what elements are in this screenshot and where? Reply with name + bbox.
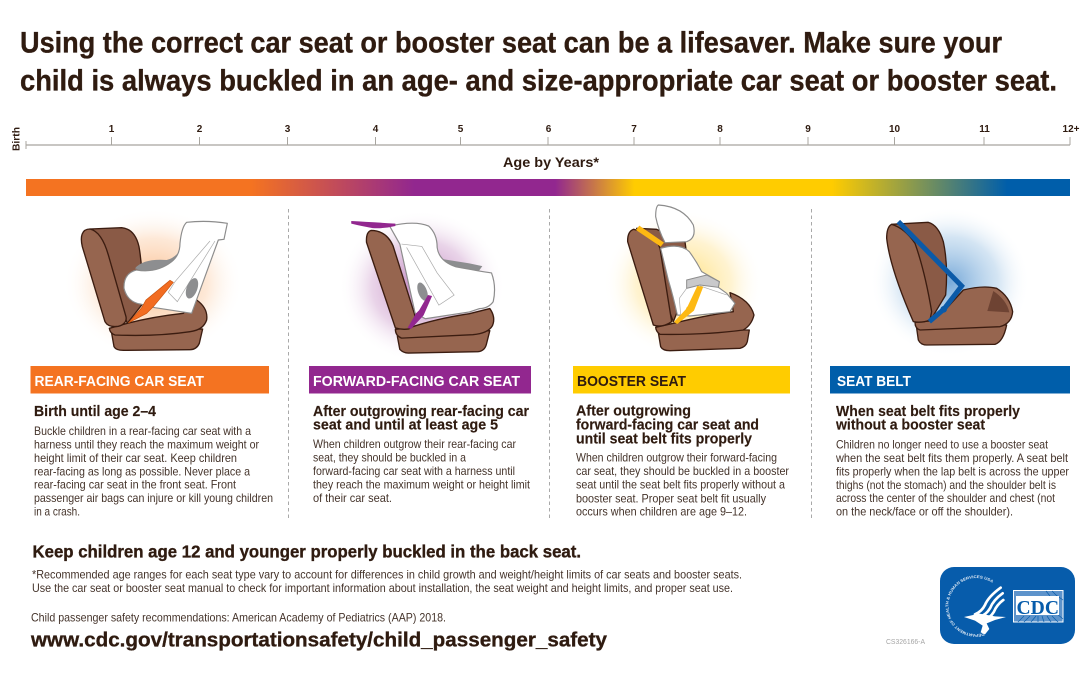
body text: rear-facing: rear-facing as long as possible. Never place a bbox=[34, 464, 250, 478]
illustration: seat belt bbox=[870, 207, 1030, 357]
header band: forward-facing: FORWARD-FACING CAR SEAT bbox=[313, 374, 520, 390]
body text: forward-facing bbox=[313, 437, 531, 505]
body text: rear-facing: rear-facing car seat in the front seat. Front bbox=[34, 478, 237, 492]
body text: rear-facing: Buckle children in a rear-facing car seat with a bbox=[34, 424, 251, 438]
header band: seat belt: SEAT BELT bbox=[837, 374, 911, 390]
CDC wordmark: CDC bbox=[1016, 597, 1059, 619]
body text: booster: seat until the seat belt fits properly without a bbox=[576, 478, 785, 492]
body text: rear-facing: in a crash. bbox=[34, 505, 80, 519]
HHS seal: DEPARTMENT OF HEALTH & HUMAN SERVICES USA bbox=[946, 575, 993, 637]
age gradient bar bbox=[26, 179, 1070, 196]
age timeline axis: 10 bbox=[889, 124, 900, 135]
body text: forward-facing: of their car seat. bbox=[313, 491, 392, 505]
subheading: forward-facing: seat and until at least age 5 bbox=[313, 418, 498, 434]
title: Using the correct car seat or booster seat can be a lifesaver. Make sure your bbox=[20, 26, 1002, 60]
header band: booster: BOOSTER SEAT bbox=[577, 374, 686, 390]
body text: forward-facing: they reach the maximum weight or height limit bbox=[313, 477, 531, 491]
body text: seat belt bbox=[835, 438, 1069, 519]
subheading: forward-facing: After outgrowing rear-facing car bbox=[313, 404, 529, 420]
footnote: Use the car seat or booster seat manual to check for important information about installation, the seat weight and height limits, and proper seat use. bbox=[32, 581, 733, 595]
panel: seat belt bbox=[830, 366, 1070, 519]
body text: rear-facing: height limit of their car seat. Keep children bbox=[34, 451, 237, 465]
body text: booster bbox=[576, 451, 789, 519]
CDC and HHS logo bbox=[940, 567, 1075, 644]
age timeline axis: 6 bbox=[546, 124, 552, 135]
subheading: forward-facing bbox=[313, 404, 529, 434]
header band: rear-facing bbox=[30, 366, 269, 394]
age timeline axis: 9 bbox=[805, 124, 811, 135]
panel: booster seat bbox=[573, 366, 790, 519]
body text: seat belt: Children no longer need to use a booster seat bbox=[836, 438, 1049, 452]
age timeline axis: 1 bbox=[109, 124, 115, 135]
age timeline axis: 2 bbox=[197, 124, 203, 135]
subheading: seat belt: When seat belt fits properly bbox=[836, 404, 1020, 420]
header band: seat belt bbox=[830, 366, 1070, 394]
age timeline axis: 7 bbox=[631, 124, 637, 135]
header band: rear-facing: REAR-FACING CAR SEAT bbox=[34, 374, 204, 390]
body text: rear-facing: passenger air bags can injure or kill young children bbox=[34, 491, 273, 505]
subheading: booster bbox=[576, 404, 759, 447]
subheading: rear-facing: Birth until age 2–4 bbox=[34, 404, 156, 420]
subheading: seat belt: without a booster seat bbox=[835, 418, 985, 434]
age timeline axis: 4 bbox=[373, 124, 379, 135]
age timeline axis: 5 bbox=[458, 124, 464, 135]
panel: rear-facing car seat bbox=[30, 366, 273, 519]
age timeline axis: 12+ bbox=[1063, 124, 1080, 135]
body text: booster: When children outgrow their forward-facing bbox=[576, 451, 777, 465]
footnote: *Recommended age ranges for each seat type vary to account for differences in child growth and weight/height limits of car seats and booster seats. bbox=[32, 567, 742, 581]
axis label: Age by Years* bbox=[503, 154, 600, 170]
illustration: booster seat bbox=[603, 205, 763, 357]
body text: forward-facing: When children outgrow their rear-facing car bbox=[313, 437, 516, 451]
header band: booster bbox=[573, 366, 790, 394]
body text: forward-facing: seat, they should be buckled in a bbox=[313, 450, 466, 464]
illustration: forward-facing car seat bbox=[339, 210, 505, 363]
header band: forward-facing bbox=[309, 366, 531, 394]
age timeline axis bbox=[10, 124, 1080, 151]
source citation: Child passenger safety recommendations: American Academy of Pediatrics (AAP) 2018. bbox=[31, 611, 446, 625]
back seat statement: Keep children age 12 and younger properly buckled in the back seat. bbox=[32, 542, 581, 562]
body text: rear-facing: harness until they reach the maximum weight or bbox=[34, 438, 259, 452]
subheading: booster: After outgrowing bbox=[576, 404, 691, 420]
body text: booster: car seat, they should be buckled in a booster bbox=[576, 464, 789, 478]
subheading: booster: until seat belt fits properly bbox=[576, 431, 752, 447]
age timeline axis: 11 bbox=[979, 124, 990, 135]
body text: forward-facing: forward-facing car seat with a harness until bbox=[313, 464, 515, 478]
panel: forward-facing car seat bbox=[309, 366, 531, 505]
body text: seat belt: on the neck/face or off the shoulder). bbox=[836, 505, 1013, 519]
publication code: CS326166-A bbox=[886, 639, 925, 646]
illustration: rear-facing car seat bbox=[63, 208, 243, 358]
body text: booster: occurs when children are age 9–12. bbox=[576, 505, 747, 519]
title bbox=[20, 26, 1057, 98]
body text: booster: booster seat. Proper seat belt fit usually bbox=[576, 491, 766, 505]
subheading: seat belt bbox=[835, 404, 1020, 434]
age timeline axis: Birth bbox=[10, 127, 22, 151]
body text: rear-facing bbox=[34, 424, 273, 519]
column dividers bbox=[288, 209, 812, 521]
website URL: www.cdc.gov/transportationsafety/child_passenger_safety bbox=[30, 630, 608, 652]
age timeline axis: 8 bbox=[717, 124, 723, 135]
footnote bbox=[32, 567, 742, 595]
subheading: booster: forward-facing car seat and bbox=[576, 417, 759, 433]
age timeline axis: 3 bbox=[285, 124, 291, 135]
